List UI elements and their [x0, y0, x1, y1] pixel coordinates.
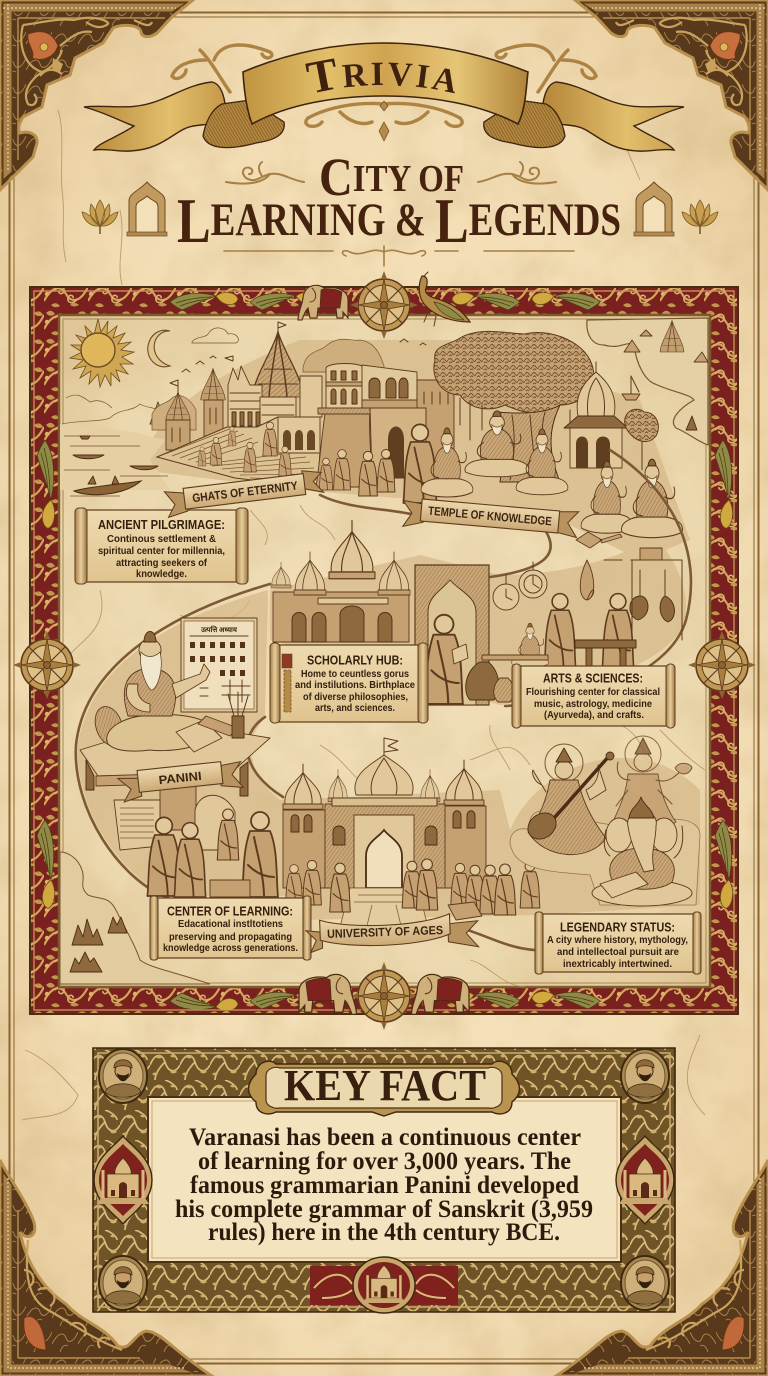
doorway with scholar — [415, 565, 489, 705]
winding road — [76, 450, 691, 950]
tree canopy — [434, 331, 594, 414]
scene: legendary deities — [510, 736, 700, 906]
lotus left — [82, 200, 118, 234]
caption: arts and sciences: (Ayurveda), and crafts. — [544, 709, 644, 721]
caption: center of learning: preserving and propagating — [169, 931, 292, 943]
ribbon: temple of knowledge — [401, 496, 579, 542]
caption: center of learning — [150, 896, 311, 960]
side domes — [283, 764, 323, 809]
flourish left — [226, 162, 304, 184]
caption: ancient pilgrimage: Continous settlement & — [107, 533, 216, 545]
ribbon: university of ages: UNIVERSITY OF AGES — [327, 923, 443, 941]
title line one: C — [319, 147, 353, 207]
parchment map field — [59, 315, 710, 987]
forecourt — [338, 888, 430, 935]
clocks — [493, 584, 519, 610]
ribbon: ghats of eternity — [164, 468, 324, 518]
title line two: EARNING & — [211, 194, 435, 246]
scroll flourishes around banner — [172, 45, 596, 126]
caption: legendary status: LEGENDARY STATUS: — [560, 920, 675, 934]
bolster — [90, 703, 128, 749]
ribbon: university of ages — [306, 913, 479, 953]
panini figure — [107, 632, 214, 751]
ribbon: panini: PANINI — [158, 769, 202, 787]
border compass right — [688, 631, 756, 699]
corner ornament bottom-left — [0, 1160, 212, 1376]
central block — [325, 804, 445, 888]
low arcade — [278, 417, 320, 453]
right ribbon tail — [542, 82, 684, 151]
caption: legendary status: and intellectoal pursuit are — [557, 946, 679, 958]
caption: legendary status — [535, 912, 701, 974]
corner ornament top-left — [0, 0, 193, 190]
scene: panini — [80, 618, 278, 897]
river — [60, 404, 172, 496]
saraswati with veena — [523, 744, 614, 855]
trunk — [497, 405, 560, 482]
cracks on map — [65, 505, 705, 987]
scene: scholarly domed complex — [271, 521, 489, 705]
key fact body: of learning for over 3,000 years. The — [198, 1148, 571, 1175]
caption: arts and sciences: Flourishing center for classical — [526, 686, 660, 698]
key fact body: his complete grammar of Sanskrit (3,959 — [175, 1196, 593, 1223]
arch left — [127, 182, 167, 236]
caption: ancient pilgrimage: attracting seekers of — [116, 557, 207, 569]
elephant bottom left — [299, 974, 356, 1014]
map fragment bottom left — [60, 852, 210, 984]
map fragment top right — [587, 318, 708, 445]
instruments and shelf — [580, 560, 594, 600]
sun — [70, 319, 134, 387]
banner folds — [203, 100, 284, 148]
band leaf accents — [37, 292, 733, 1011]
ribbon: panini — [117, 760, 244, 802]
far skyline — [150, 402, 166, 424]
banner centre — [243, 43, 528, 124]
medallion portraits — [99, 1049, 147, 1103]
key fact plaque — [248, 1061, 520, 1116]
temples — [166, 392, 190, 420]
pavilion — [577, 372, 615, 416]
boats — [74, 481, 141, 495]
sanskrit board: उत्पत्ति अध्याय — [200, 625, 238, 634]
clouds — [510, 810, 700, 905]
palace and fort — [300, 376, 322, 417]
red taj medallion right — [616, 1136, 674, 1224]
corner ornament bottom-right — [556, 1160, 768, 1376]
panel: key fact — [93, 1048, 675, 1313]
caption: arts and sciences: music, astrology, medicine — [534, 698, 652, 710]
caption: center of learning: knowledge across generations. — [163, 942, 298, 954]
caption: scholarly hub: arts, and sciences. — [315, 702, 395, 714]
caption: ancient pilgrimage: knowledge. — [136, 568, 187, 580]
left ribbon tail — [84, 82, 226, 151]
caption: arts and sciences — [512, 664, 675, 728]
seated students — [285, 865, 303, 905]
red taj medallion bottom — [353, 1257, 415, 1313]
scene: banyan tree and sages — [319, 331, 682, 548]
key fact heading: KEY FACT — [284, 1061, 486, 1110]
key fact ornate frame — [93, 1048, 675, 1312]
title line two: L — [177, 185, 211, 256]
goddess in clouds — [612, 736, 692, 829]
pilgrims on stairs — [198, 447, 206, 466]
key fact body: Varanasi has been a continuous center — [189, 1124, 581, 1151]
caption: legendary status: inextricably intertwined. — [563, 958, 672, 970]
scene: university of ages — [283, 738, 540, 935]
crescent moon — [148, 330, 170, 367]
caption: scholarly hub: SCHOLARLY HUB: — [307, 654, 403, 668]
ganesha — [592, 797, 692, 906]
border compass bottom — [350, 962, 418, 1030]
caption: scholarly hub: of diverse philosophies, — [303, 691, 408, 703]
clouds and birds — [66, 328, 426, 408]
heading: trivia: TRIVIA — [305, 58, 455, 94]
desk — [80, 722, 270, 776]
bottom red strip — [310, 1266, 458, 1305]
title underline — [224, 246, 574, 266]
lotus right — [682, 200, 718, 234]
border compass left — [13, 631, 81, 699]
main dome — [355, 755, 413, 795]
small tree — [625, 409, 658, 442]
elephant top — [298, 285, 348, 320]
caption: arts and sciences: ARTS & SCIENCES: — [543, 672, 643, 686]
books and ground — [576, 532, 622, 548]
illuminated initial — [282, 654, 292, 668]
scholars — [319, 458, 333, 490]
arch right — [634, 182, 674, 236]
title line one: ITY OF — [353, 158, 464, 200]
caption: ancient pilgrimage — [75, 508, 248, 584]
caption: center of learning: CENTER OF LEARNING: — [167, 904, 293, 918]
scene: ghats of eternity — [60, 322, 454, 496]
elephant bottom right — [412, 974, 469, 1014]
key fact body — [175, 1124, 593, 1246]
flourish right — [478, 162, 556, 184]
red taj medallion left — [94, 1136, 152, 1224]
trivia banner — [84, 42, 684, 152]
desk items — [176, 720, 222, 752]
sanskrit board — [181, 618, 257, 712]
sepia washes behind scenes — [78, 340, 700, 920]
ornate red border — [30, 287, 738, 1014]
caption: scholarly hub: and instilutions. Birthplace — [295, 679, 415, 691]
students and teacher — [114, 800, 160, 850]
key fact body: famous grammarian Panini developed — [190, 1172, 579, 1199]
title line two: L — [435, 185, 469, 256]
workers — [544, 594, 576, 668]
key fact text panel — [148, 1097, 621, 1262]
main title — [82, 147, 718, 266]
caption: ancient pilgrimage: ANCIENT PILGRIMAGE: — [98, 518, 225, 532]
stairs — [157, 417, 320, 488]
corner ornament top-right — [575, 0, 768, 190]
caption: legendary status: A city where history, mythology, — [547, 934, 688, 946]
title line two: EGENDS — [469, 194, 621, 246]
border compass top — [350, 271, 418, 339]
towers — [283, 810, 325, 888]
panel: illustrated map frame — [13, 271, 756, 1030]
key fact body: rules) here in the 4th century BCE. — [208, 1219, 560, 1246]
caption: ancient pilgrimage: spiritual center for millennia, — [98, 545, 225, 557]
caption: center of learning: Edacational instltotiens — [178, 918, 283, 930]
ribbon: ghats of eternity: GHATS OF ETERNITY — [192, 478, 298, 505]
peacock top — [419, 272, 470, 326]
scene: arts and sciences workshop — [466, 548, 682, 702]
caption: scholarly hub: Home to ceuntless gorus — [301, 668, 409, 680]
caption: scholarly hub — [270, 643, 428, 723]
ribbon: temple of knowledge: TEMPLE OF KNOWLEDGE — [428, 504, 552, 528]
